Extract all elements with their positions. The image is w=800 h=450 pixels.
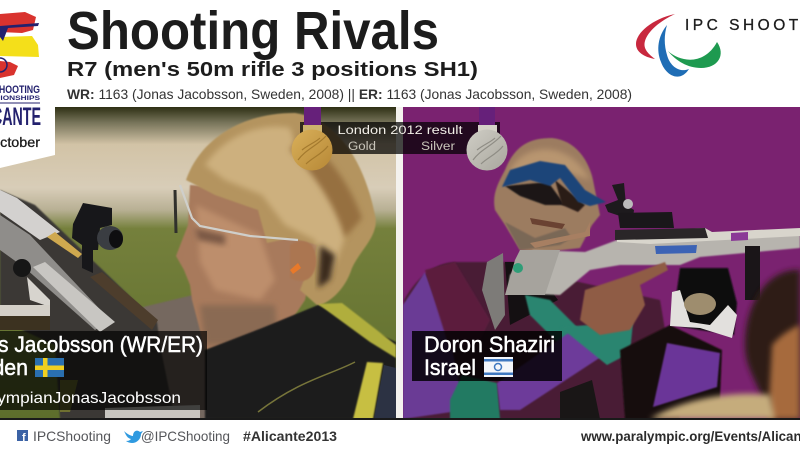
rifle (0, 190, 175, 419)
footer: social links: #Alicante2013 (243, 428, 337, 444)
body (404, 262, 680, 419)
icon: twitter bird (124, 431, 143, 443)
rifle sight (605, 183, 634, 218)
rifle (507, 230, 800, 295)
result heading: London 2012 result (338, 125, 464, 137)
blurred spectator (745, 270, 800, 419)
face (176, 185, 318, 350)
hair (186, 113, 376, 306)
title: Shooting Rivals (67, 1, 439, 61)
silver label: Silver (421, 141, 455, 153)
panel: championship logo (0, 0, 55, 168)
trigger hand (580, 262, 668, 335)
glasses (180, 185, 298, 240)
rifle sight (72, 203, 112, 273)
icon: facebook: f (22, 432, 26, 444)
gold label: Gold (348, 141, 376, 153)
caption: Doron Shaziri: Doron Shaziri (424, 332, 555, 357)
caption: Doron Shaziri (412, 331, 562, 381)
visor (502, 161, 606, 206)
icon: Sweden flag (35, 358, 64, 377)
jacket (205, 305, 396, 419)
glove (672, 268, 737, 335)
subtitle: R7 (men's 50m rifle 3 positions SH1) (67, 59, 478, 81)
icon: IPC agitos logo (636, 14, 721, 77)
icon: gold medal (292, 107, 332, 170)
records line: WR: 1163 (Jonas Jacobsson, Sweden, 2008) || ER: 1163 (Jonas Jacobsson, Sweden, 2008) (67, 86, 632, 102)
icon: Spanish colours brushstrokes (0, 12, 39, 78)
icon: silver medal (466, 107, 508, 170)
icon: Israel flag (484, 357, 513, 377)
white header band (55, 0, 800, 106)
footer: social links: IPCShooting (33, 428, 111, 444)
photo: Jonas Jacobsson (0, 107, 396, 419)
caption: Jonas Jacobsson (0, 331, 207, 410)
icon: facebook (17, 430, 28, 444)
footer: social links: @IPCShooting (141, 428, 230, 444)
photo: Doron Shaziri (403, 107, 800, 419)
shoulder (143, 295, 206, 418)
panel: London 2012 result (292, 107, 508, 170)
head (494, 138, 600, 252)
photo bottom rule (0, 418, 800, 420)
divider (396, 107, 403, 419)
caption: Doron Shaziri: Israel (424, 355, 476, 380)
ear with orange plug (290, 241, 316, 281)
footer: social links (17, 428, 337, 444)
cheek rest (530, 222, 590, 248)
